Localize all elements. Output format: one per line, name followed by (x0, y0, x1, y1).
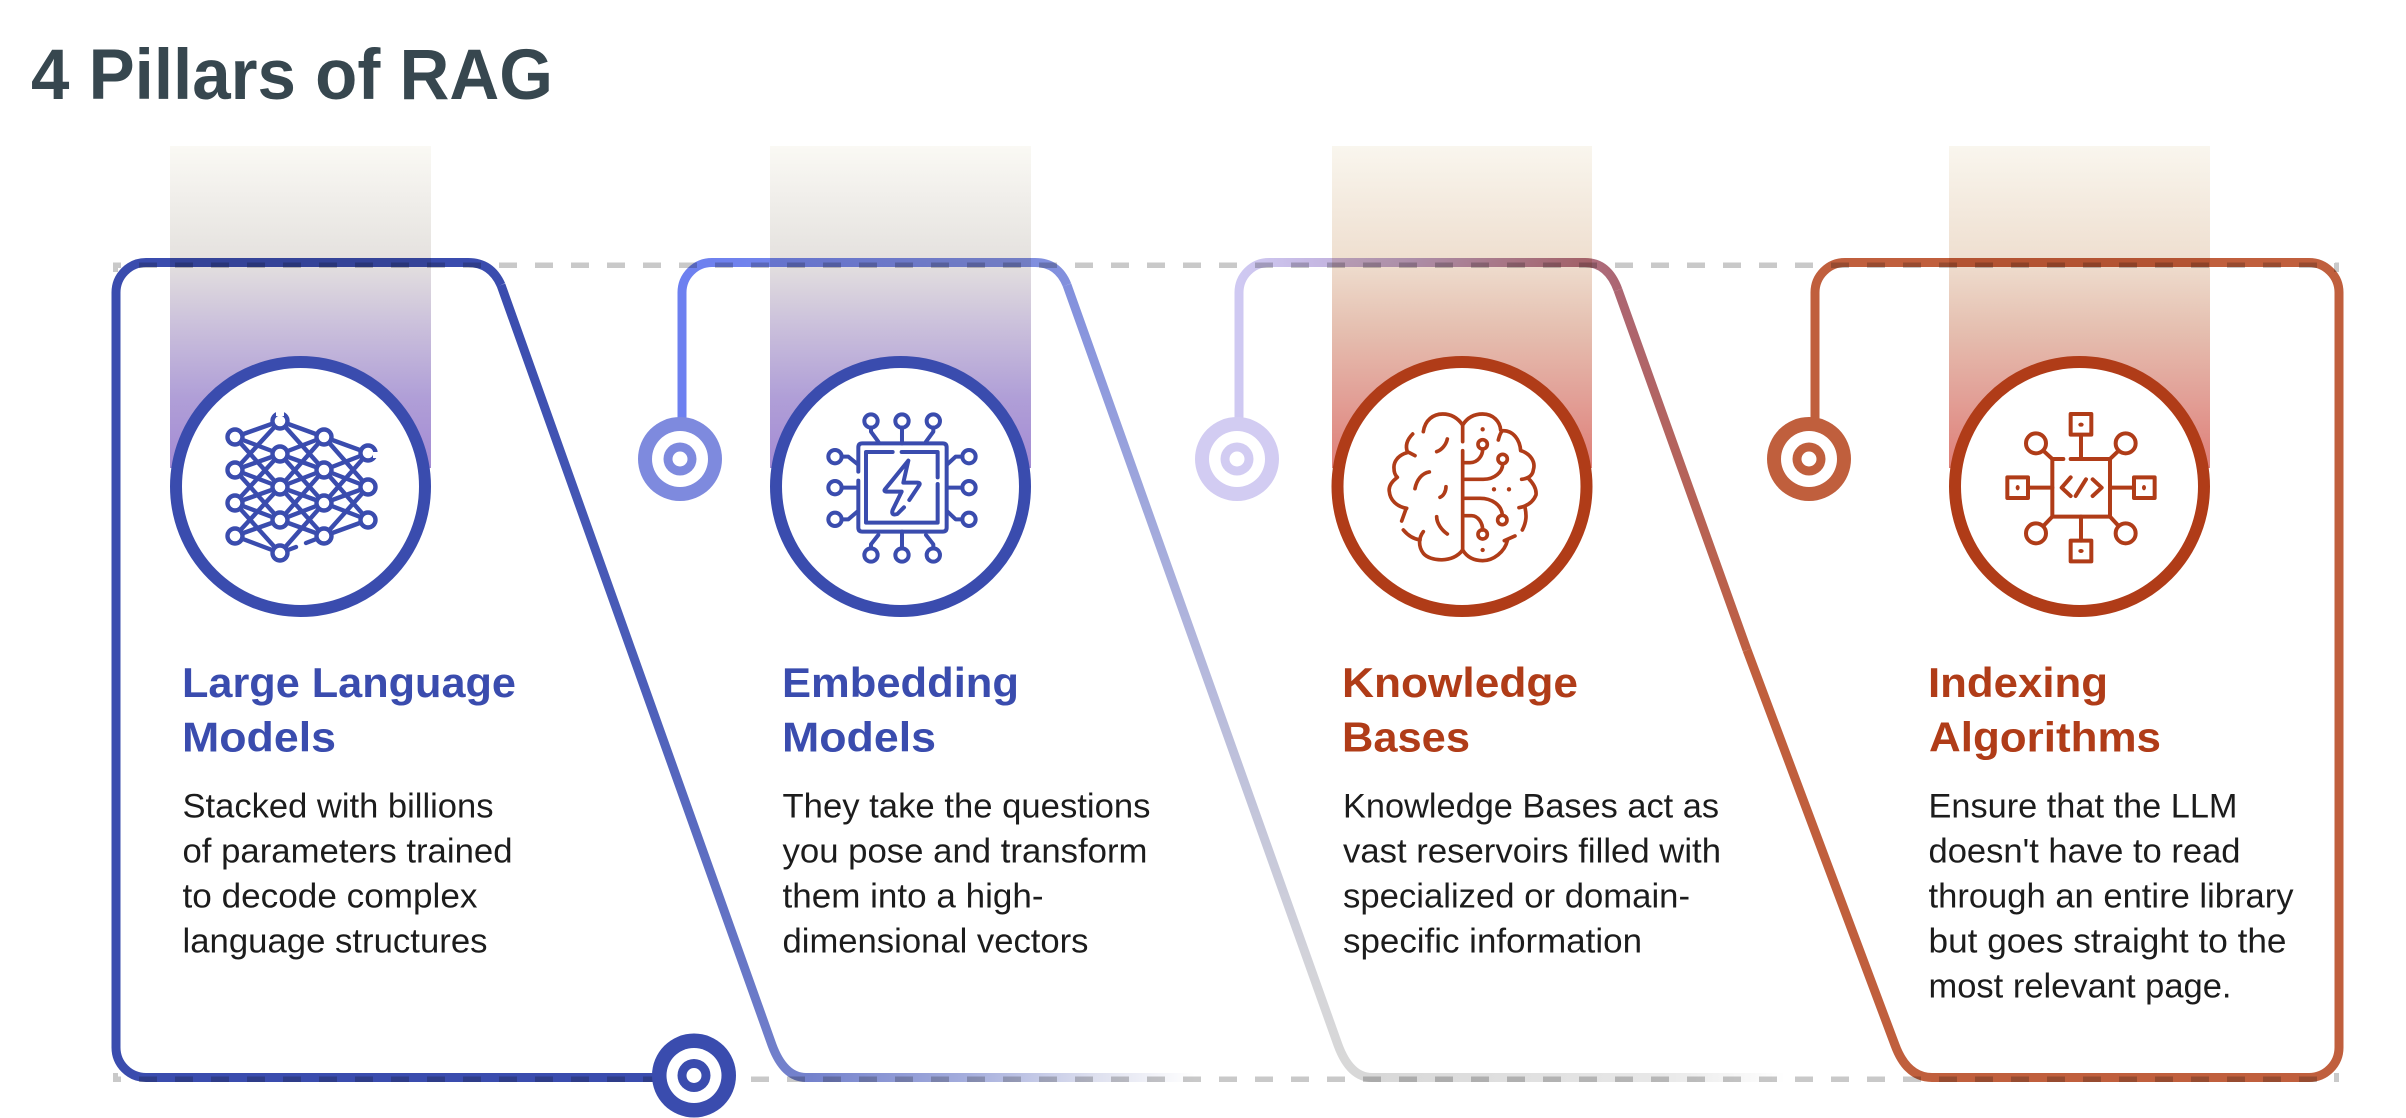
text: knowledge bases description: specialized or domain- (1343, 878, 1690, 916)
card outline: knowledge bases and indexing algorithms (1239, 262, 2339, 1078)
text: knowledge bases description (1343, 788, 1721, 960)
connector node: card 3 (1195, 417, 1279, 501)
card outline: large language models (116, 262, 1195, 1078)
gradient band 3 (1332, 146, 1592, 468)
heading: knowledge bases (1342, 659, 1578, 760)
icon circle 4 (1955, 362, 2204, 611)
text: indexing algorithms description: doesn't have to read (1928, 832, 2240, 870)
text: embedding models description: dimensional vectors (782, 922, 1088, 960)
card outline: embedding models (682, 262, 1785, 1078)
text: large language models description: to decode complex (182, 878, 478, 916)
text: embedding models description: you pose and transform (782, 832, 1148, 870)
connector node: card 1 (652, 1034, 736, 1118)
heading: embedding models: Models (782, 714, 936, 760)
text: indexing algorithms description: Ensure that the LLM (1928, 788, 2238, 826)
heading: indexing algorithms: Algorithms (1929, 714, 2161, 760)
text: indexing algorithms description: but goes straight to the (1928, 922, 2286, 960)
heading: indexing algorithms (1928, 659, 2161, 760)
heading: knowledge bases: Bases (1342, 714, 1470, 760)
text: large language models description: language structures (182, 922, 488, 960)
heading: embedding models (782, 659, 1019, 760)
icon circle 3 (1338, 362, 1586, 611)
text: knowledge bases description: vast reservoirs filled with (1343, 832, 1721, 870)
icon circle 2 (776, 362, 1025, 611)
heading: large language models (182, 659, 516, 760)
text: knowledge bases description: specific information (1343, 922, 1642, 960)
heading: large language models: Large Language (182, 659, 516, 706)
title: 4 Pillars of RAG (31, 36, 553, 115)
text: indexing algorithms description: most relevant page. (1928, 968, 2232, 1006)
text: large language models description: Stacked with billions (182, 788, 494, 826)
heading: knowledge bases: Knowledge (1342, 659, 1578, 706)
text: knowledge bases description: Knowledge Bases act as (1343, 788, 1719, 826)
icon: code network (2007, 414, 2155, 561)
gradient band 4 (1949, 146, 2210, 468)
gradient band 2 (770, 146, 1031, 468)
dashed frame (113, 263, 2339, 1082)
text: embedding models description: them into a high- (782, 878, 1044, 916)
text: embedding models description: They take the questions (782, 788, 1150, 826)
icon circle 1 (176, 362, 425, 611)
text: indexing algorithms description (1928, 788, 2294, 1006)
heading: embedding models: Embedding (782, 659, 1019, 706)
connector node: card 4 (1767, 417, 1851, 501)
connector node: card 2 (638, 417, 722, 501)
text: embedding models description (782, 788, 1150, 960)
text: large language models description (182, 788, 512, 960)
icon: brain (1389, 414, 1536, 561)
icon: neural network (228, 409, 381, 560)
gradient band 1 (170, 146, 431, 468)
text: indexing algorithms description: through an entire library (1928, 878, 2294, 916)
text: large language models description: of parameters trained (182, 832, 512, 870)
heading: large language models: Models (182, 714, 336, 760)
heading: indexing algorithms: Indexing (1928, 659, 2108, 706)
icon: chip with lightning bolt (828, 414, 976, 562)
